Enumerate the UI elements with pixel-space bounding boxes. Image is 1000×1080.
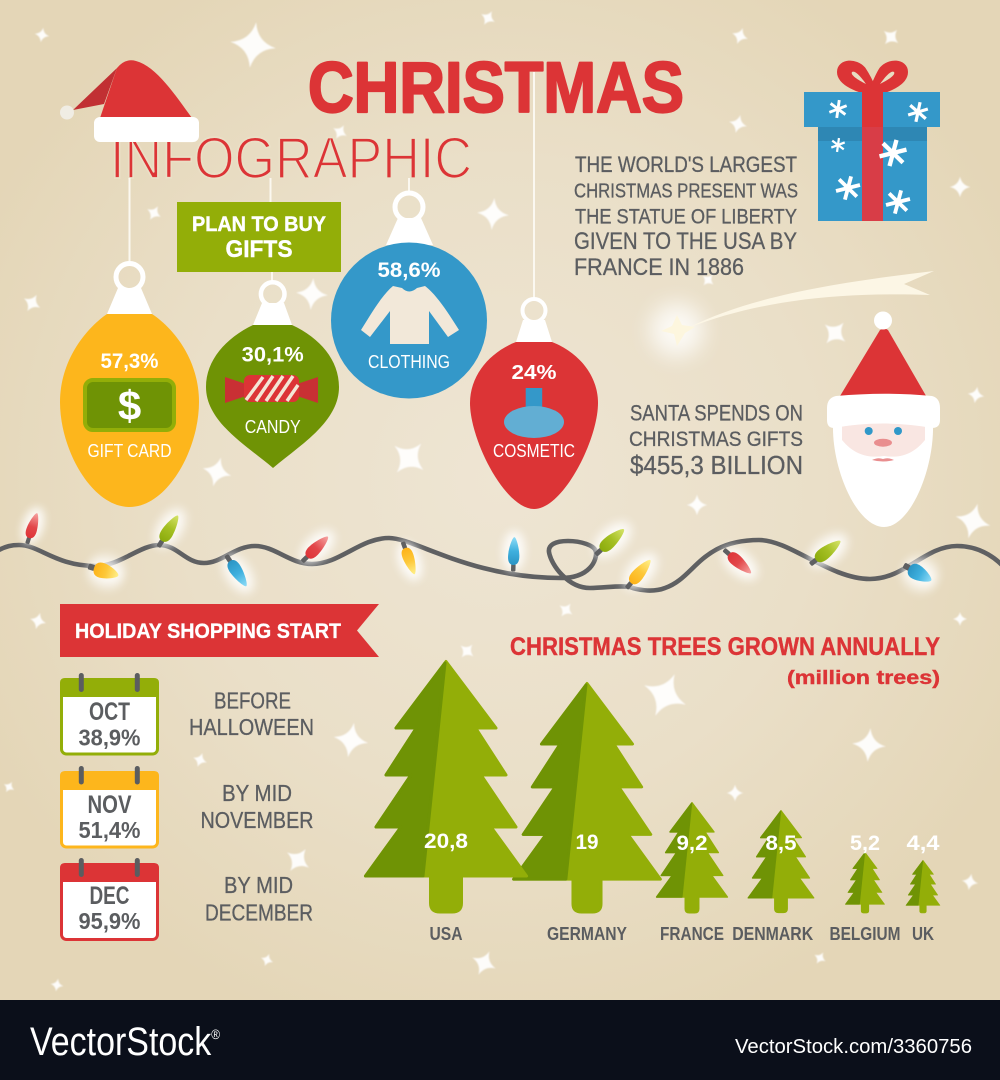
ornament: candy 30,1%: CANDY xyxy=(245,417,301,437)
ornament: cosmetic 24%: 24% xyxy=(512,362,557,384)
heading: christmas trees grown annually: CHRISTMAS TREES GROWN ANNUALLY xyxy=(510,633,940,661)
label: by mid november xyxy=(200,780,314,833)
text block: santa spends xyxy=(629,400,803,480)
tree: usa 20,8 xyxy=(366,662,526,944)
tree: denmark 8,5: DENMARK xyxy=(732,924,813,944)
text block: statue of liberty fact: THE WORLD'S LARGEST xyxy=(575,152,797,177)
tree: denmark 8,5: 8,5 xyxy=(766,832,797,855)
tree: belgium 5,2: BELGIUM xyxy=(830,924,900,944)
tree: belgium 5,2: 5,2 xyxy=(850,832,880,855)
banner: holiday shopping start xyxy=(60,604,379,657)
calendar: NOV 51,4% xyxy=(60,766,159,847)
ornament: gift card 57,3%: $ xyxy=(118,382,141,429)
icon: santa hat xyxy=(60,60,199,142)
tree chart: trees grown by country xyxy=(366,662,940,944)
ornament: gift card 57,3%: 57,3% xyxy=(100,350,159,373)
tree: france 9,2: FRANCE xyxy=(660,924,724,944)
title: INFOGRAPHIC: INFOGRAPHIC xyxy=(110,126,472,191)
label: before halloween xyxy=(189,688,314,740)
ornament: clothing 58,6%: 58,6% xyxy=(378,259,441,282)
footer bar xyxy=(0,1000,1000,1080)
text block: santa spends: $455,3 BILLION xyxy=(630,450,803,480)
label: by mid december xyxy=(205,872,313,926)
text block: santa spends: SANTA SPENDS ON xyxy=(630,400,803,426)
label: plan to buy gifts: PLAN TO BUY xyxy=(192,213,326,236)
tree: germany 19: GERMANY xyxy=(547,924,627,944)
icon: sweater xyxy=(361,286,459,344)
calendar: DEC 95,9%: DEC xyxy=(90,882,130,910)
text block: santa spends: CHRISTMAS GIFTS xyxy=(629,427,803,451)
footer bar: ® xyxy=(211,1026,221,1042)
footer bar: VectorStock.com/3360756 xyxy=(735,1036,972,1058)
icon: shooting star xyxy=(650,271,934,357)
tree: uk 4,4: UK xyxy=(912,924,934,944)
tree: belgium 5,2 xyxy=(830,832,900,944)
icon: gift box xyxy=(804,65,940,221)
label: by mid november: BY MID xyxy=(222,780,292,806)
calendar: DEC 95,9%: 95,9% xyxy=(78,908,140,934)
footer bar: VectorStock xyxy=(30,1020,243,1064)
ornament: clothing 58,6%: CLOTHING xyxy=(368,352,450,372)
tree: france 9,2 xyxy=(657,803,727,944)
tree: france 9,2: 9,2 xyxy=(676,832,708,855)
label: plan to buy gifts xyxy=(177,202,341,272)
tree: usa 20,8: USA xyxy=(430,924,462,944)
calendar: OCT 38,9%: 38,9% xyxy=(78,724,140,750)
calendar: NOV 51,4%: 51,4% xyxy=(78,817,140,843)
ornament: gift card 57,3% xyxy=(60,264,199,507)
ornament: cosmetic 24%: COSMETIC xyxy=(493,441,575,461)
text block: statue of liberty fact: FRANCE IN 1886 xyxy=(574,254,744,281)
ornament: candy 30,1% xyxy=(206,282,339,468)
ornament: clothing 58,6% xyxy=(331,193,487,398)
icon: santa face xyxy=(827,312,940,527)
text block: statue of liberty fact xyxy=(574,152,798,281)
heading: christmas trees grown annually: (million trees) xyxy=(787,668,940,689)
label: before halloween: HALLOWEEN xyxy=(189,714,314,740)
label: before halloween: BEFORE xyxy=(214,688,291,714)
banner: holiday shopping start: HOLIDAY SHOPPING START xyxy=(75,620,341,643)
text block: statue of liberty fact: GIVEN TO THE USA BY xyxy=(574,228,797,255)
tree: germany 19 xyxy=(514,683,660,944)
tree: germany 19: 19 xyxy=(576,831,598,854)
tree: denmark 8,5 xyxy=(732,811,814,944)
tree: uk 4,4 xyxy=(906,832,940,944)
tree: usa 20,8: 20,8 xyxy=(424,830,468,853)
text block: statue of liberty fact: CHRISTMAS PRESENT WAS xyxy=(574,180,798,202)
calendar: OCT 38,9%: OCT xyxy=(89,698,130,726)
tree: uk 4,4: 4,4 xyxy=(906,832,940,855)
label: by mid november: NOVEMBER xyxy=(200,807,314,833)
title: CHRISTMAS: CHRISTMAS xyxy=(308,49,684,128)
label: by mid december: BY MID xyxy=(224,872,293,898)
heading: christmas trees grown annually xyxy=(510,633,940,689)
label: plan to buy gifts: GIFTS xyxy=(226,236,292,263)
calendar: NOV 51,4%: NOV xyxy=(88,791,132,819)
string of christmas lights xyxy=(0,503,1000,599)
ornament: candy 30,1%: 30,1% xyxy=(242,344,304,366)
calendar: OCT 38,9% xyxy=(60,673,159,754)
ornament: gift card 57,3%: GIFT CARD xyxy=(88,441,172,461)
calendar: DEC 95,9% xyxy=(60,858,159,940)
text block: statue of liberty fact: THE STATUE OF LIBERTY xyxy=(575,204,797,228)
ornament: cosmetic 24% xyxy=(470,299,598,509)
label: by mid december: DECEMBER xyxy=(205,900,313,926)
hanging strings xyxy=(130,72,534,299)
